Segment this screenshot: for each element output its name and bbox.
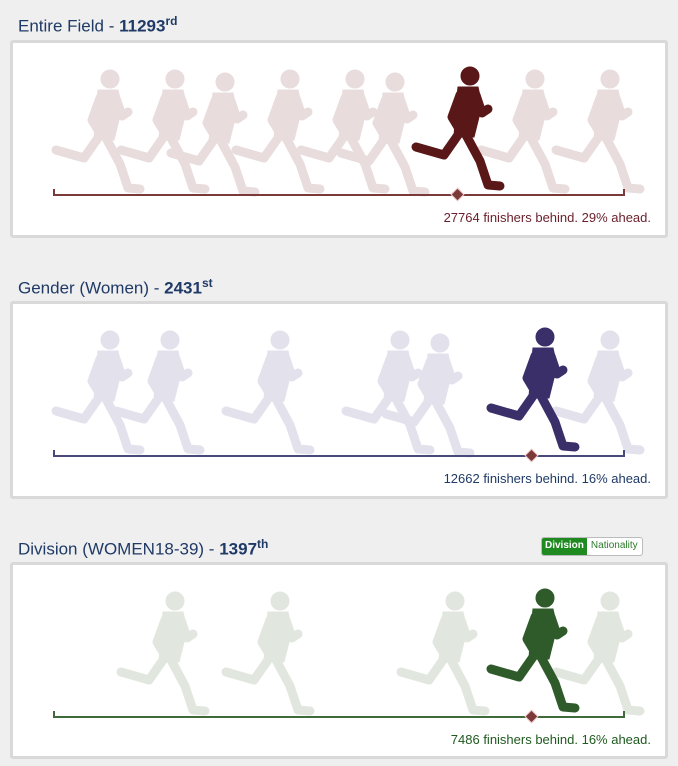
highlighted runner: [491, 589, 575, 708]
ghost runners: [56, 331, 640, 453]
ghost runners: [56, 70, 640, 192]
title: gender: Gender (Women) - 2431st: [18, 276, 213, 298]
toggle: division / nationality: [541, 537, 643, 556]
highlighted runner: [491, 328, 575, 447]
highlighted runner: [416, 67, 500, 186]
panel: division: [10, 562, 668, 759]
toggle: division / nationality: Division: [545, 540, 584, 551]
panel: gender: [10, 301, 668, 499]
title: entire field: Entire Field - 11293rd: [18, 14, 177, 36]
caption: 27764 finishers behind. 29% ahead.: [444, 210, 651, 225]
caption: 12662 finishers behind. 16% ahead.: [444, 471, 651, 486]
toggle: division / nationality: Nationality: [591, 540, 638, 551]
caption: 7486 finishers behind. 16% ahead.: [451, 732, 651, 747]
scale line: [54, 710, 624, 723]
scale line: [54, 188, 624, 201]
panel: entire field: [10, 40, 668, 238]
scale line: [54, 449, 624, 462]
title: division: Division (WOMEN18-39) - 1397th: [18, 537, 268, 559]
ghost runners: [121, 592, 640, 711]
